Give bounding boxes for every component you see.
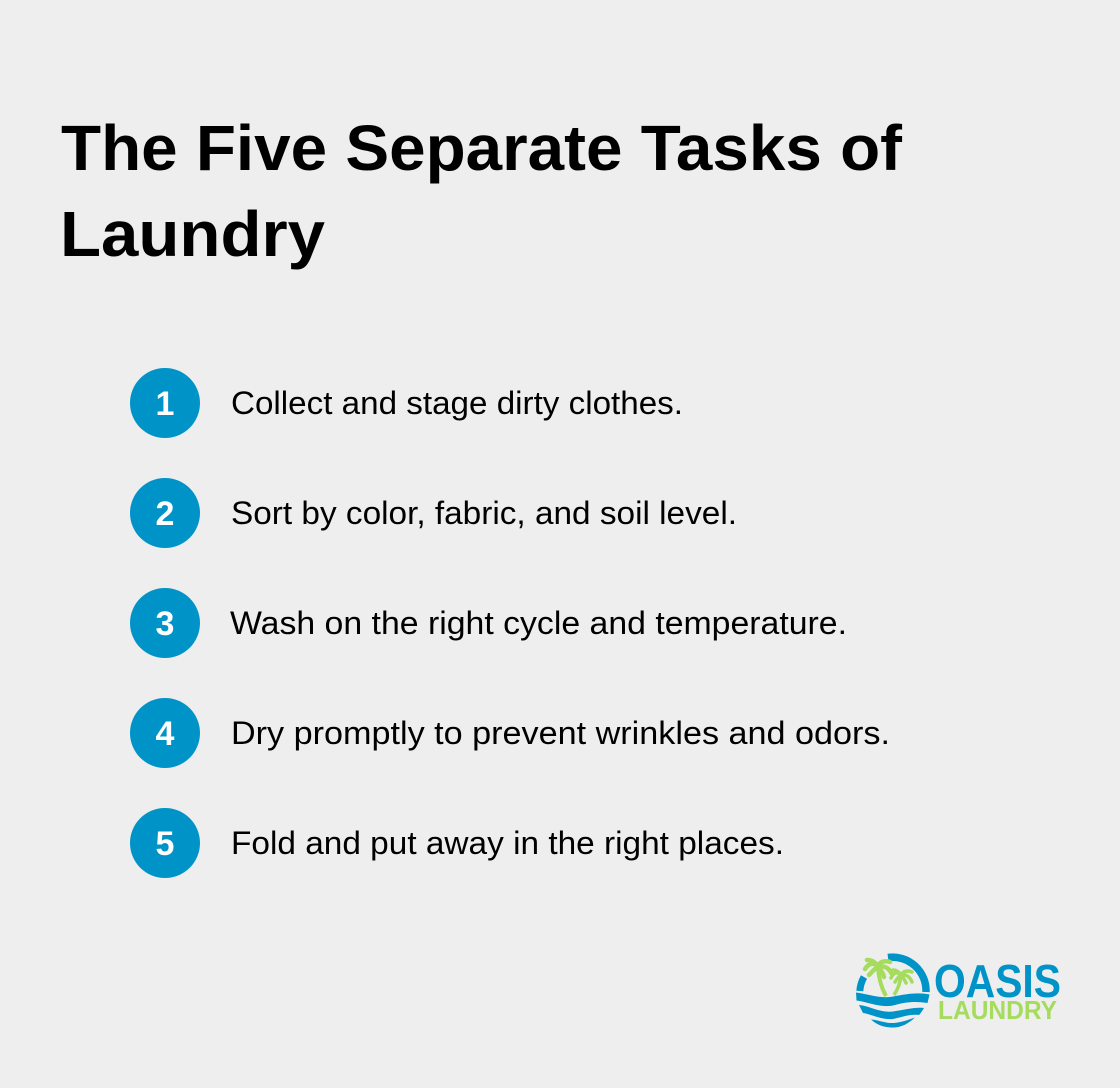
step 2: 2: [156, 495, 174, 533]
title: Laundry: [60, 198, 325, 270]
step 1: [130, 368, 683, 438]
wordmark: LAUNDRY: LAUNDRY: [938, 995, 1057, 1025]
step 3: 3: [156, 605, 174, 643]
step 4: [130, 698, 890, 768]
step 2: Sort by color, fabric, and soil level.: [231, 495, 737, 531]
step 2: [130, 478, 737, 548]
step 3: Wash on the right cycle and temperature.: [230, 605, 847, 641]
title: [60, 112, 903, 270]
title: The Five Separate Tasks of: [61, 112, 903, 184]
logo: Oasis Laundry: [856, 955, 1061, 1028]
step 1: 1: [156, 385, 174, 423]
step 4: 4: [156, 715, 175, 753]
step 3: [130, 588, 847, 658]
wordmark: OASIS: OASIS: [934, 955, 1061, 1007]
step 4: Dry promptly to prevent wrinkles and odors.: [231, 715, 890, 751]
step 5: [130, 808, 784, 878]
step 5: Fold and put away in the right places.: [231, 825, 784, 861]
step list: [130, 368, 890, 878]
step 5: 5: [156, 825, 174, 863]
icon: palm trees over waves: [856, 957, 930, 1028]
step 1: Collect and stage dirty clothes.: [231, 385, 683, 421]
